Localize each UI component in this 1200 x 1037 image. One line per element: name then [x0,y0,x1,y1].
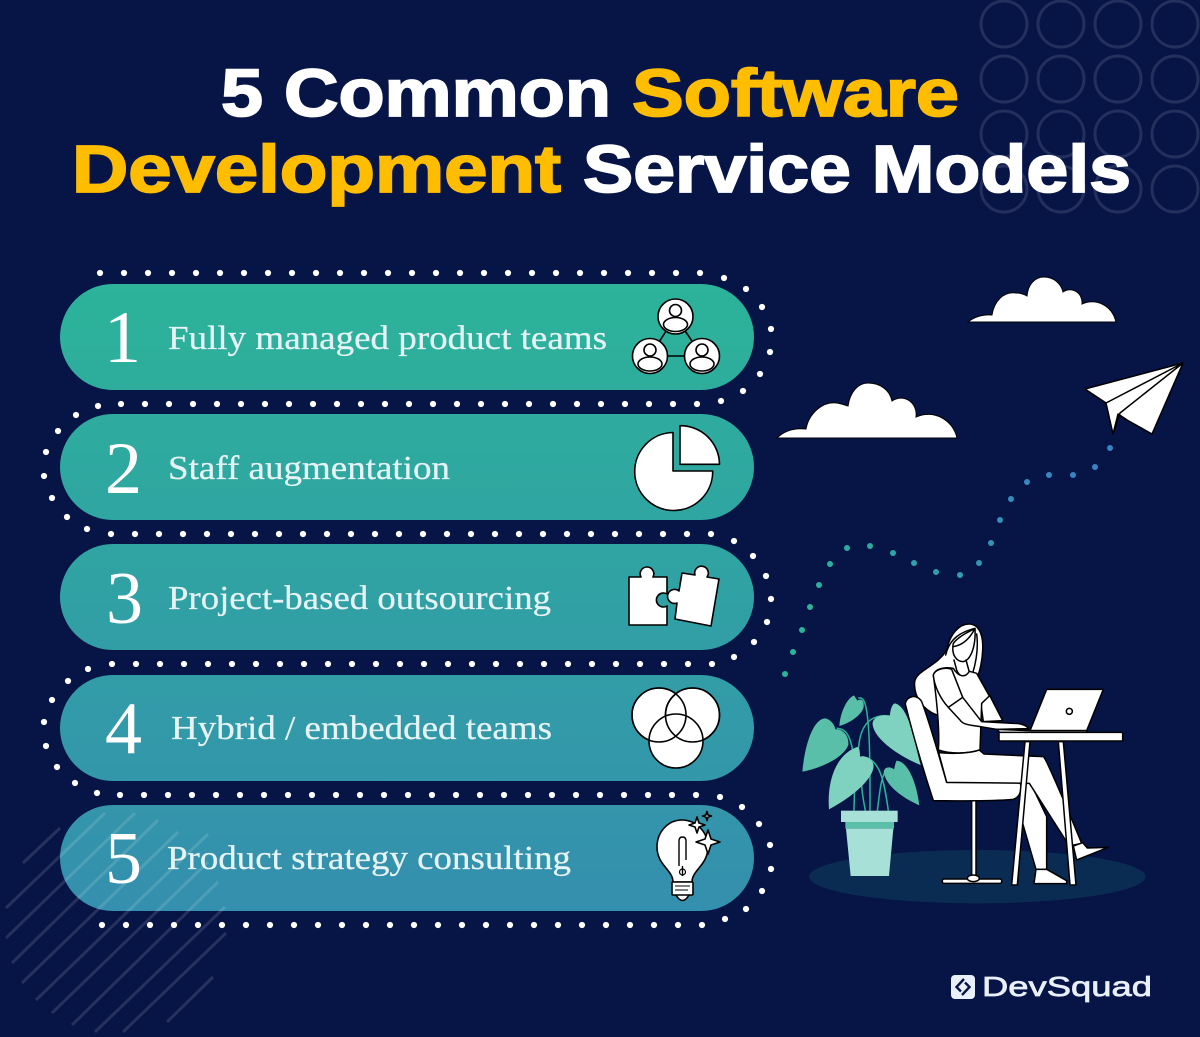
hair [915,624,983,715]
illustration: woman at desk with plant [802,624,1146,903]
plant [802,695,921,876]
chair [905,697,1021,801]
panel: item 2: 2 [105,428,142,510]
logo: DevSquad: DevSquad [982,971,1152,1002]
dotted path around the list [41,273,774,925]
shirt [933,668,989,753]
back arm and chair stem [977,678,1003,722]
title: Development [72,132,561,207]
label: product strategy consulting: Product strategy consulting [167,840,571,877]
icon: pie chart [635,426,720,510]
title [72,56,1131,207]
panel: item 1 [60,284,754,390]
panel: item 4 [60,675,754,781]
dotted flight path [782,445,1113,677]
label: staff augmentation: Staff augmentation [168,450,450,487]
icon: connected team [632,299,720,374]
label: project-based outsourcing: Project-based outsourcing [168,580,551,617]
icon: puzzle pieces [629,566,719,626]
back leg [980,754,1047,869]
cloud: upper [968,277,1116,322]
panel: item 3: 3 [106,558,143,640]
icon: light bulb with sparkles [657,812,720,900]
lap and front leg [939,750,1082,846]
logo: DevSquad [951,971,1152,1002]
panel: item 5: 5 [105,818,142,900]
title: Software [632,56,959,131]
label: fully managed product teams: Fully managed product teams [168,320,607,357]
label: hybrid / embedded teams: Hybrid / embedded teams [171,710,552,747]
laptop [1030,689,1103,731]
icon: paper plane [1085,363,1183,434]
panel: item 5 [60,805,754,911]
desk [999,732,1123,885]
panel: item 2 [60,414,754,520]
title: Service Models [583,132,1131,207]
title: 5 Common [221,56,611,131]
panel: item 1: 1 [104,297,141,379]
cloud: lower [777,383,957,438]
face and neck [953,629,975,662]
panel: item 3 [60,544,754,650]
panel: item 4: 4 [105,688,142,770]
icon: venn diagram [632,688,720,768]
decorative circle grid [981,1,1198,212]
front arm [933,668,1028,729]
decorative diagonal hatch [6,813,226,1032]
